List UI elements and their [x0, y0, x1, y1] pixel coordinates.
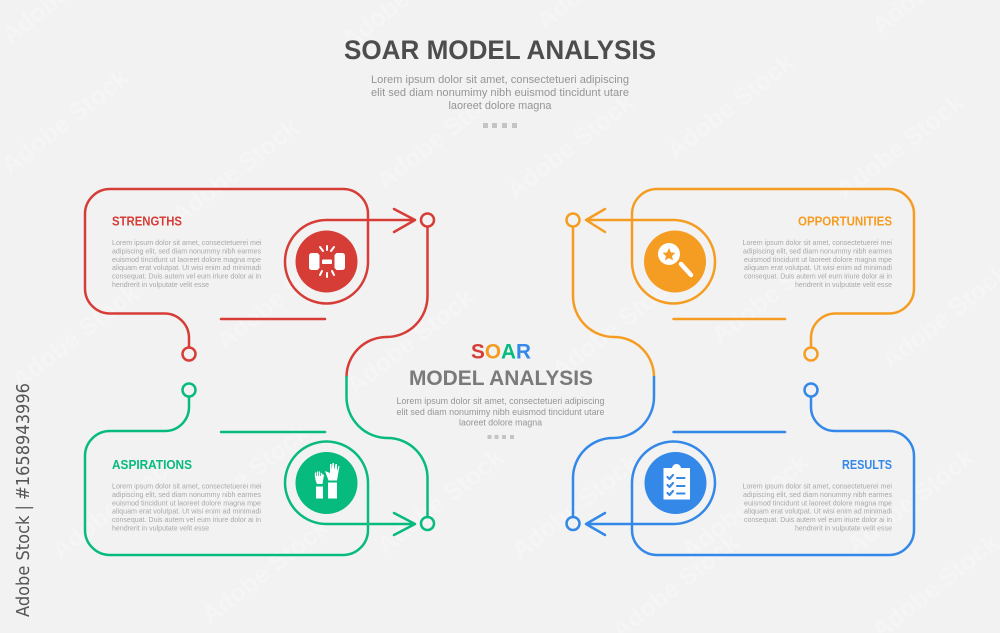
- panel: strengths: [85, 189, 415, 360]
- watermark pattern: Adobe Stock: [501, 89, 639, 205]
- watermark pattern: Adobe Stock: [176, 419, 314, 535]
- subtitle: [371, 74, 629, 112]
- panel: aspirations: [85, 384, 415, 555]
- orange start node: [804, 348, 818, 360]
- aspirations text: hendrerit in vulputate velit esse: [112, 524, 209, 532]
- icon: clipboard checklist: [644, 452, 706, 514]
- aspirations text: [112, 482, 262, 532]
- strengths text: euismod tincidunt ut laoreet dolore magna mpe: [112, 255, 261, 264]
- watermark pattern: Adobe Stock: [6, 279, 144, 395]
- orange outline with ring and arrow: [586, 189, 914, 347]
- aspirations text: Lorem ipsum dolor sit amet, consectetuerei mei: [112, 482, 262, 490]
- opportunities text: consequat. Duis autem vel eum iriure dolor ai in: [744, 272, 892, 281]
- watermark pattern: Adobe Stock: [46, 449, 184, 565]
- aspirations text: adipiscing elit, sed diam nonummy nibh earmes: [112, 490, 261, 499]
- watermark pattern: Adobe Stock: [341, 284, 479, 400]
- blue end node: [566, 517, 580, 530]
- center heading: model analysis: MODEL ANALYSIS: [409, 367, 593, 390]
- icon: raised hands: [296, 452, 358, 514]
- aspirations text: euismod tincidunt ut laoreet dolore magna mpe: [112, 498, 261, 507]
- center text: elit sed diam nonumimy nibh euismod tincidunt utare: [396, 406, 604, 417]
- heading: aspirations: ASPIRATIONS: [112, 458, 192, 472]
- watermark pattern: Adobe Stock: [706, 234, 844, 350]
- watermark pattern: Adobe Stock: [0, 64, 134, 180]
- blue divider bar: [674, 431, 785, 433]
- red end node: [421, 214, 434, 226]
- heading: results: RESULTS: [842, 458, 892, 472]
- aspirations text: consequat. Duis autem vel eum iriure dolor ai in: [112, 515, 261, 524]
- opportunities text: adipiscing elit, sed diam nonummy nibh earmes: [743, 246, 892, 255]
- connector: orange: [573, 227, 654, 377]
- orange divider bar: [674, 318, 785, 320]
- center dots: [488, 435, 514, 439]
- results text: aliquam erat volutpat. Ut wisi enim ad minimadi: [744, 507, 892, 516]
- watermark pattern: Adobe Stock: [676, 449, 814, 565]
- results text: [742, 482, 892, 532]
- center text: Lorem ipsum dolor sit amet, consectetueri adipiscing: [396, 395, 604, 406]
- watermark pattern: Adobe Stock: [831, 89, 969, 205]
- opportunities text: Lorem ipsum dolor sit amet, consectetuerei mei: [742, 238, 892, 247]
- panel: results: [586, 384, 914, 555]
- center text: laoreet dolore magna: [459, 416, 543, 428]
- watermark pattern: Adobe Stock: [166, 114, 304, 230]
- connector: green: [346, 377, 428, 517]
- heading: strengths: STRENGTHS: [112, 214, 182, 228]
- opportunities text: euismod tincidunt ut laoreet dolore magna mpe: [744, 255, 892, 264]
- results text: euismod tincidunt ut laoreet dolore magna mpe: [744, 498, 892, 507]
- watermark pattern: Adobe Stock: [841, 444, 979, 560]
- subtitle: laoreet dolore magna: [448, 100, 552, 112]
- red divider bar: [221, 318, 325, 320]
- watermark pattern: Adobe Stock: [546, 269, 684, 385]
- results text: Lorem ipsum dolor sit amet, consectetuerei mei: [742, 482, 892, 490]
- green divider bar: [221, 431, 325, 433]
- strengths text: adipiscing elit, sed diam nonummy nibh earmes: [112, 246, 261, 255]
- watermark pattern: Adobe Stock: [211, 239, 349, 355]
- icon: broken dumbbell: [296, 230, 358, 292]
- strengths text: consequat. Duis autem vel eum iriure dolor ai in: [112, 272, 261, 281]
- results text: adipiscing elit, sed diam nonummy nibh earmes: [743, 490, 892, 499]
- strengths text: hendrerit in vulputate velit esse: [112, 280, 209, 289]
- opportunities text: aliquam erat volutpat. Ut wisi enim ad minimadi: [744, 263, 892, 272]
- watermark pattern: Adobe Stock: [371, 444, 509, 560]
- subtitle: Lorem ipsum dolor sit amet, consectetueri adipiscing: [371, 74, 629, 86]
- red outline with ring and arrow: [85, 189, 415, 347]
- green start node: [182, 384, 196, 396]
- side stock label: Adobe Stock | #1658943996: [13, 383, 34, 617]
- opportunities text: hendrerit in vulputate velit esse: [795, 280, 892, 289]
- icon: magnifier with star: [644, 230, 706, 292]
- aspirations text: aliquam erat volutpat. Ut wisi enim ad minimadi: [112, 507, 261, 516]
- results text: consequat. Duis autem vel eum iriure dolor ai in: [744, 515, 892, 524]
- blue start node: [804, 384, 818, 396]
- red start node: [182, 348, 196, 360]
- watermark pattern: Adobe Stock: [196, 514, 334, 630]
- center heading: SOAR: SOAR: [471, 340, 531, 364]
- connector: blue: [573, 377, 654, 517]
- subtitle: elit sed diam nonumimy nibh euismod tincidunt utare: [371, 87, 629, 99]
- opportunities text: [742, 238, 892, 289]
- panel: opportunities: [586, 189, 914, 360]
- watermark pattern: Adobe Stock: [371, 79, 509, 195]
- watermark pattern: Adobe Stock: [506, 449, 644, 565]
- strengths text: aliquam erat volutpat. Ut wisi enim ad minimadi: [112, 263, 261, 272]
- watermark pattern: Adobe Stock: [661, 49, 799, 165]
- orange end node: [566, 214, 580, 226]
- title dots: [483, 123, 517, 128]
- green outline with ring and arrow: [85, 397, 415, 555]
- blue outline with ring and arrow: [586, 397, 914, 555]
- center text: [396, 395, 604, 428]
- connector: red: [346, 227, 428, 377]
- strengths text: [112, 238, 262, 289]
- green end node: [421, 517, 434, 530]
- title: SOAR MODEL ANALYSIS: [344, 35, 656, 65]
- strengths text: Lorem ipsum dolor sit amet, consectetuerei mei: [112, 238, 262, 247]
- results text: hendrerit in vulputate velit esse: [795, 524, 892, 532]
- heading: opportunities: OPPORTUNITIES: [798, 214, 892, 228]
